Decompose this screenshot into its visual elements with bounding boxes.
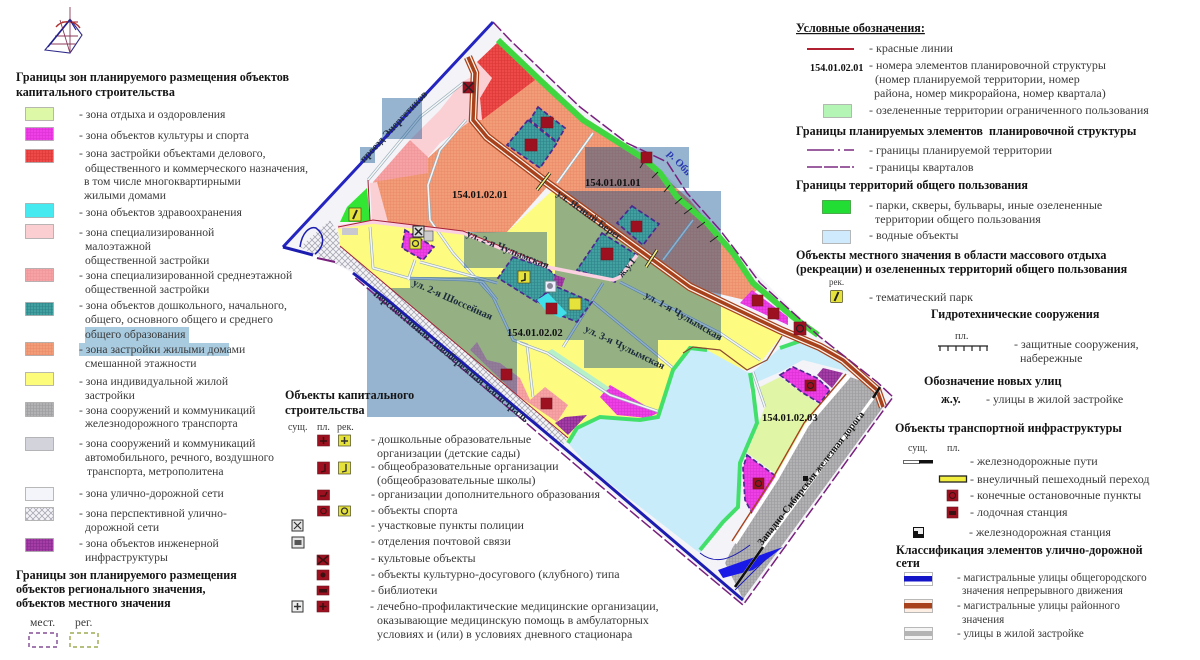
- grey block: [342, 228, 358, 235]
- heading: objects: строительства: [285, 403, 365, 417]
- section: recreation: Объекты местного значения в области массового отдыха: [796, 248, 1106, 262]
- shore red line: [683, 336, 782, 370]
- section: street classification: - магистральные улицы общегородского: [957, 572, 1147, 584]
- panel: regional and local zones: рег.: [75, 616, 92, 629]
- section: new streets: ж.у.: [941, 392, 961, 406]
- street names: ул. 2-я Шоссейная: [411, 278, 494, 323]
- legend text: zones: - зона отдыха и оздоровления: [79, 108, 226, 121]
- legend text: zones: общественной застройки: [85, 254, 209, 267]
- section: public territories: - водные объекты: [869, 228, 958, 242]
- legend text: zones: - зона сооружений и коммуникаций: [79, 404, 255, 417]
- quarter labels: 154.01.02.03: [762, 413, 818, 424]
- lake green shore: [568, 340, 837, 550]
- legend text: objects: - культовые объекты: [371, 551, 476, 565]
- legend text: zones: общественной застройки: [85, 283, 209, 296]
- column headers: сущ.: [288, 422, 308, 433]
- street names: Западно-Сибирская железная дорога: [756, 410, 867, 548]
- legend text: objects: (общеобразовательные школы): [377, 473, 535, 487]
- legend text: zones: [79, 108, 308, 564]
- legend: general: (номер планируемой территории, номер: [875, 72, 1080, 86]
- railway interchange: [300, 228, 783, 590]
- legend text: zones: общего образования: [85, 328, 186, 341]
- zone: south-east recreation: [747, 377, 820, 475]
- legend: general: - красные линии: [869, 41, 954, 55]
- column headers: рек.: [337, 422, 354, 433]
- section: hydro: Гидротехнические сооружения: [931, 307, 1100, 321]
- legend text: objects: - библиотеки: [371, 583, 438, 597]
- legend text: zones: - зона объектов дошкольного, начального,: [79, 299, 287, 312]
- legend: general: - озелененные территории ограниченного пользования: [869, 103, 1149, 117]
- panel: capital construction zones legend: [16, 70, 308, 564]
- pink street: [338, 222, 637, 280]
- street names: [358, 89, 867, 548]
- section: public territories: Границы территорий общего пользования: [796, 178, 1028, 192]
- legend text: zones: - зона объектов здравоохранения: [79, 206, 242, 219]
- street names: ул. 2-я Чулымская: [465, 229, 551, 272]
- legend text: zones: - зона сооружений и коммуникаций: [79, 437, 255, 450]
- zone: low-rise strip: [370, 182, 388, 222]
- quarter labels: 154.01.02.01: [452, 190, 508, 201]
- section: recreation: [796, 248, 1128, 304]
- section: street classification: - улицы в жилой застройке: [957, 628, 1084, 640]
- legend text: objects: - организации дополнительного образования: [371, 487, 600, 501]
- zone: mid-rise public: [373, 140, 428, 182]
- section: hydro: - защитные сооружения,: [1014, 337, 1139, 351]
- legend text: objects: - объекты культурно-досугового (клубного) типа: [371, 567, 620, 581]
- legend text: zones: - зона специализированной среднеэтажной: [79, 269, 292, 282]
- map: planning territory: [283, 22, 893, 605]
- section: recreation: рек.: [829, 277, 844, 287]
- zone: grey railway: [725, 377, 886, 599]
- section: street classification: [896, 543, 1147, 640]
- section: public territories: [796, 178, 1102, 244]
- legend text: zones: - зона индивидуальной жилой: [79, 375, 228, 388]
- section: transport: Объекты транспортной инфраструктуры: [895, 421, 1122, 435]
- section: hydro: пл.: [955, 331, 968, 342]
- section: planning boundaries: Границы планируемых элементов планировочной структуры: [796, 124, 1137, 138]
- section: planning boundaries: - границы планируемой территории: [869, 143, 1053, 157]
- red line symbol: [807, 48, 854, 50]
- zone: lake branch: [753, 340, 850, 382]
- section: transport: - конечные остановочные пункты: [970, 488, 1141, 502]
- legend text: zones: застройки: [85, 389, 135, 402]
- legend text: zones: - зона застройки объектами делового,: [79, 147, 266, 160]
- plots without border: [537, 293, 567, 318]
- street names: проезд Энергетиков: [358, 89, 430, 165]
- icon: compass rose: [45, 7, 82, 53]
- street names: ж.у.1: [616, 256, 638, 280]
- legend text: zones: транспорта, метрополитена: [87, 465, 224, 478]
- street names: ул. 1-я Чулымская: [642, 290, 724, 344]
- legend text: objects: - отделения почтовой связи: [371, 534, 511, 548]
- main highway blue: [283, 22, 743, 600]
- legend text: zones: - зона застройки жилыми домами: [79, 343, 245, 356]
- section: hydro: [931, 307, 1139, 365]
- legend text: zones: - зона специализированной: [79, 226, 214, 239]
- pedestrian crossings: [537, 173, 657, 267]
- section: transport: - железнодорожная станция: [969, 525, 1111, 539]
- legend text: objects: оказывающие медицинскую помощь в амбулаторных: [377, 613, 649, 627]
- panel: capital construction objects legend: [285, 388, 659, 641]
- legend text: objects: - участковые пункты полиции: [371, 518, 525, 532]
- legend text: zones: инфраструктуры: [85, 551, 168, 564]
- legend text: objects: - лечебно-профилактические медицинские организации,: [370, 599, 659, 613]
- territory boundary and embankment: [353, 22, 893, 605]
- section: public territories: территории общего пользования: [875, 212, 1041, 226]
- legend text: objects: - объекты спорта: [371, 503, 458, 517]
- legend text: zones: железнодорожного транспорта: [84, 417, 238, 430]
- legend text: objects: организации (детские сады): [377, 446, 520, 460]
- section: recreation: (рекреации) и озелененных территорий общего пользования: [796, 262, 1128, 276]
- heading: objects: Объекты капитального: [285, 388, 414, 402]
- quarter labels: [452, 178, 818, 424]
- railway line: [735, 387, 880, 587]
- section: planning boundaries: - границы кварталов: [869, 160, 974, 174]
- zone: perspective road hatch: [300, 220, 568, 446]
- heading: objects: [285, 388, 414, 417]
- section: street classification: сети: [896, 556, 920, 570]
- section: transport: [895, 421, 1150, 539]
- map icons: [349, 82, 816, 489]
- legend: general: 154.01.02.01: [810, 63, 863, 74]
- section: street classification: значения непрерывного движения: [962, 585, 1123, 597]
- object icons: [292, 435, 350, 612]
- quarter labels: 154.01.01.01: [585, 178, 641, 189]
- legend text: zones: малоэтажной: [85, 240, 151, 253]
- zone: mid-rise south: [470, 342, 568, 422]
- section: transport: - лодочная станция: [970, 505, 1068, 519]
- legend text: zones: общественного и коммерческого назначения,: [85, 162, 308, 175]
- street names: перспективная Левобережная магистраль: [371, 289, 531, 425]
- section: new streets: - улицы в жилой застройке: [986, 392, 1123, 406]
- legend text: zones: - зона объектов инженерной: [79, 537, 219, 550]
- zone: red business: [477, 42, 535, 120]
- zone: orange residential: [373, 42, 757, 300]
- zone: green band: [547, 349, 610, 393]
- street red edge: [338, 180, 568, 438]
- title: Условные обозначения:: [796, 21, 925, 35]
- legend text: objects: - общеобразовательные организации: [371, 459, 559, 473]
- section: new streets: [924, 374, 1123, 406]
- panel: regional and local zones: Границы зон планируемого размещения: [16, 568, 237, 582]
- zone: magenta culture south: [600, 385, 658, 418]
- zone: park west: [340, 188, 370, 222]
- legend text: zones: - зона объектов культуры и спорта: [79, 129, 249, 142]
- legend text: objects: [370, 432, 659, 641]
- green border strip: [498, 40, 818, 335]
- zone: purple infrastructure south: [555, 415, 587, 435]
- quarter labels: 154.01.02.02: [507, 328, 563, 339]
- legend text: zones: автомобильного, речного, воздушного: [85, 451, 274, 464]
- legend text: zones: жилыми домами: [83, 189, 166, 202]
- text highlight: [79, 327, 229, 356]
- heading: zones: капитального строительства: [16, 85, 175, 99]
- zone: low-rise public: [410, 62, 492, 157]
- legend: general: - номера элементов планировочной структуры: [869, 58, 1106, 72]
- legend: general: района, номер микрорайона, номер квартала): [874, 86, 1106, 100]
- section: transport: - железнодорожные пути: [970, 454, 1098, 468]
- heading: zones: [16, 70, 289, 99]
- streets: [368, 83, 765, 412]
- zone: lake: [568, 348, 757, 553]
- section: public territories: - парки, скверы, бульвары, иные озелененные: [869, 198, 1102, 212]
- column headers: [288, 422, 354, 433]
- legend text: objects: - дошкольные образовательные: [371, 432, 531, 446]
- legend swatches: [26, 108, 54, 552]
- section: planning boundaries: [796, 124, 1137, 174]
- legend text: objects: условиях и (или) в условиях дневного стационара: [377, 627, 633, 641]
- legend text: zones: - зона улично-дорожной сети: [79, 487, 224, 500]
- panel: regional and local zones: мест.: [30, 616, 55, 629]
- legend text: zones: в том числе многоквартирными: [84, 175, 241, 188]
- legend text: zones: - зона перспективной улично-: [79, 507, 227, 520]
- section: transport: - внеуличный пешеходный переход: [970, 472, 1150, 486]
- section: street classification: - магистральные улицы районного: [957, 600, 1120, 612]
- mosaic overlay tiles: [360, 98, 721, 417]
- legend text: zones: общего, основного общего и среднего: [85, 313, 273, 326]
- section: street classification: Классификация элементов улично-дорожной: [896, 543, 1143, 557]
- section: street classification: значения: [962, 614, 1004, 626]
- street names: ул. Ясный Берег: [554, 189, 624, 243]
- panel: regional and local zones: объектов регионального значения,: [16, 582, 206, 596]
- zone: yellow individual housing: [338, 190, 782, 442]
- main district road: [468, 57, 883, 543]
- pedestrian crossings inner: [537, 173, 657, 267]
- territory base: [283, 23, 893, 604]
- school and culture plots: [402, 107, 830, 515]
- street names: р. Обь: [665, 149, 693, 178]
- street names: ул. 3-я Чулымская: [583, 324, 667, 372]
- section: transport: сущ.: [908, 443, 928, 454]
- section: new streets: Обозначение новых улиц: [924, 374, 1062, 388]
- section: recreation: - тематический парк: [869, 290, 973, 304]
- panel: regional and local zones: [16, 568, 237, 647]
- legend text: zones: дорожной сети: [85, 521, 159, 534]
- panel: regional and local zones: объектов местного значения: [16, 596, 171, 610]
- panel: main legend right: [796, 21, 1150, 640]
- heading: zones: Границы зон планируемого размещения объектов: [16, 70, 289, 84]
- section: transport: пл.: [947, 443, 960, 454]
- section: hydro: набережные: [1020, 351, 1082, 365]
- column headers: пл.: [317, 422, 330, 433]
- legend: general: [810, 41, 1149, 118]
- legend text: zones: смешанной этажности: [85, 357, 197, 370]
